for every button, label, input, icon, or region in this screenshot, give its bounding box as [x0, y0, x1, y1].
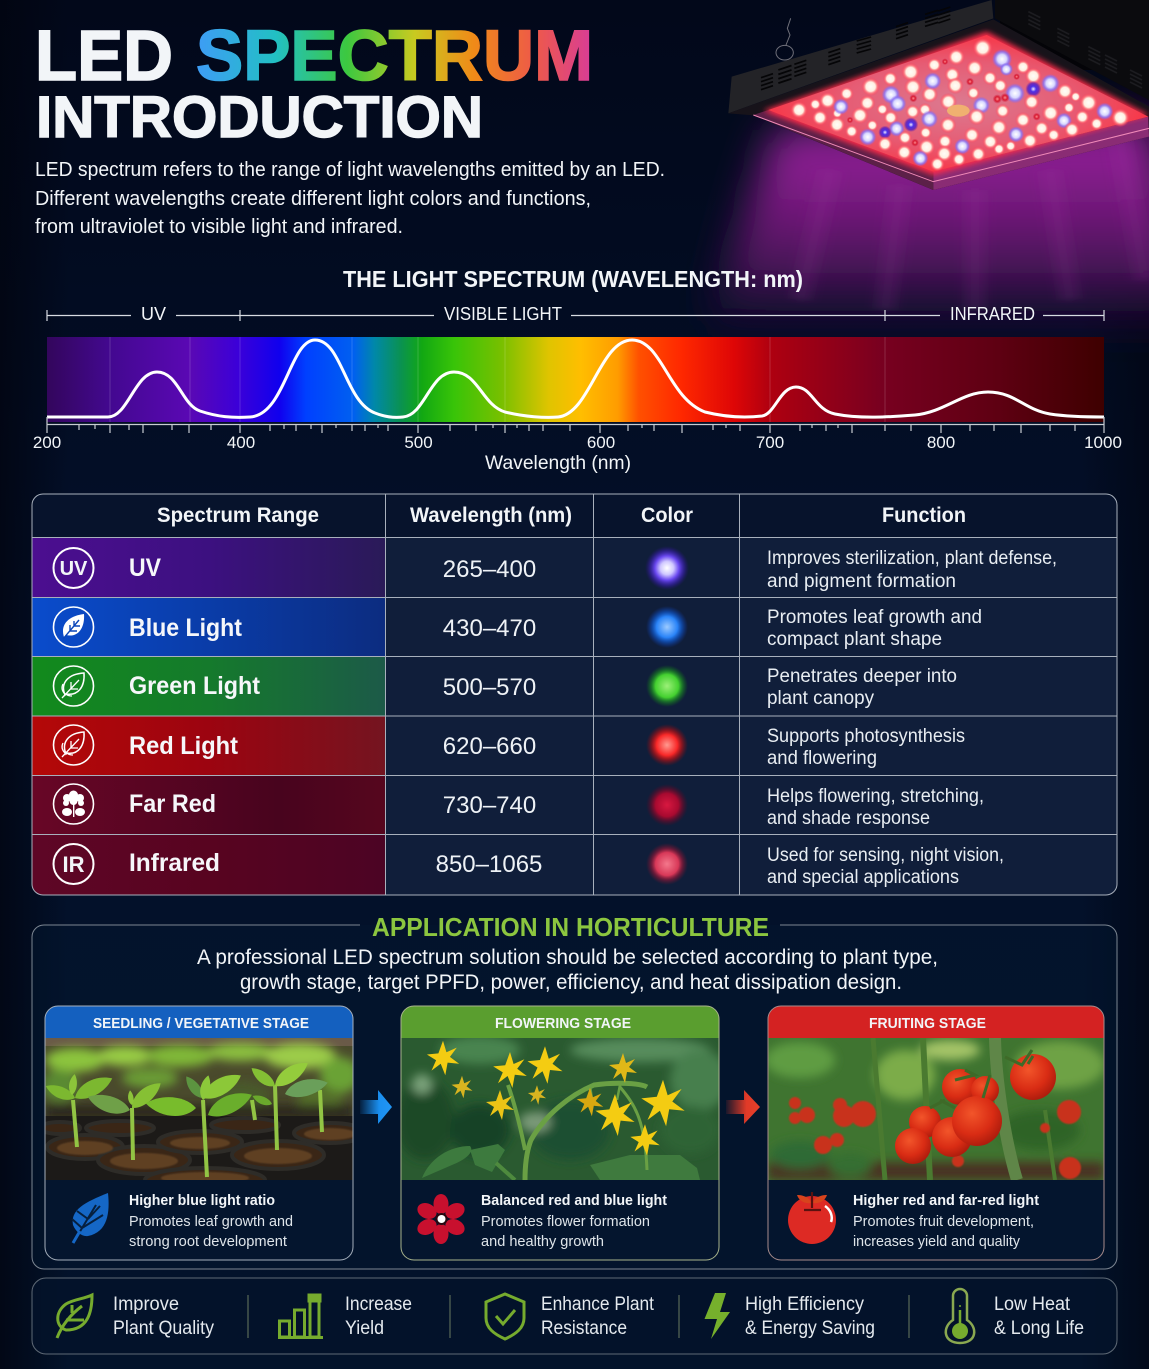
title — [35, 17, 593, 150]
arrow: red — [726, 1090, 760, 1124]
icon: blue leaf — [72, 1193, 109, 1243]
icon: blue leaf — [54, 607, 94, 647]
background tomatoes — [789, 1097, 1081, 1179]
benefit: plant quality: Plant Quality — [113, 1318, 214, 1339]
card: fruiting stage — [765, 1006, 1105, 1260]
title: LED — [35, 17, 173, 96]
foreground tomatoes — [895, 1054, 1056, 1164]
wavelength axis — [47, 417, 1104, 433]
yellow blossoms — [427, 1041, 685, 1156]
icon: tomato — [788, 1192, 836, 1244]
row: Green Light — [54, 665, 957, 709]
row: Green Light: Penetrates deeper into — [767, 666, 957, 687]
benefit: long life: & Long Life — [994, 1318, 1084, 1339]
row: Far Red: Helps flowering, stretching, — [767, 786, 984, 807]
description: growth stage, target PPFD, power, efficiency, and heat dissipation design. — [240, 971, 902, 994]
row: Blue Light: Promotes leaf growth and — [767, 607, 982, 628]
intro text: LED spectrum refers to the range of light wavelengths emitted by an LED. — [35, 159, 665, 181]
intro text: Different wavelengths create different light colors and functions, — [35, 188, 591, 210]
row: UV: UV — [129, 554, 161, 582]
spectrum colour band — [47, 337, 1104, 422]
illustration: grow light panel — [728, 0, 1149, 190]
heading: APPLICATION IN HORTICULTURE — [372, 912, 769, 942]
arrow: blue — [360, 1090, 392, 1124]
row: Red Light: Red Light — [129, 732, 239, 760]
icon: red leaf — [54, 725, 94, 765]
axis labels: 200 — [33, 433, 61, 452]
card text: Promotes flower formation — [481, 1213, 650, 1230]
benefit: resistance: Resistance — [541, 1318, 627, 1339]
vines — [873, 1038, 1055, 1180]
intro text: from ultraviolet to visible light and infrared. — [35, 216, 403, 238]
benefit: resistance: Enhance Plant — [541, 1294, 655, 1315]
lamp right side — [995, 0, 1149, 100]
row: Infrared: Infrared — [129, 849, 220, 877]
icon: far red plant — [54, 784, 94, 824]
row: Infrared: Used for sensing, night vision, — [767, 845, 1004, 866]
card: seedling stage — [40, 1006, 366, 1260]
title: INTRODUCTION — [36, 85, 483, 150]
icon: UV: UV — [60, 558, 88, 580]
icon: bar chart — [278, 1295, 323, 1338]
main stem — [995, 1038, 1017, 1180]
title: SPECTRUM — [196, 17, 593, 96]
row: Blue Light: 430–470 — [443, 615, 536, 642]
description: A professional LED spectrum solution should be selected according to plant type, — [197, 946, 938, 969]
row: Blue Light: compact plant shape — [767, 629, 942, 650]
card: fruiting stage: FRUITING STAGE — [869, 1015, 986, 1032]
photo: yellow flowers — [395, 1036, 730, 1180]
axis labels: 1000 — [1084, 433, 1122, 452]
benefit: plant quality — [57, 1294, 214, 1339]
icon: shield — [486, 1294, 524, 1339]
table header: Spectrum Range — [157, 504, 319, 527]
vents — [761, 7, 1142, 90]
icon: UV — [54, 548, 94, 588]
card text: increases yield and quality — [853, 1233, 1020, 1250]
axis labels: Wavelength (nm) — [485, 453, 631, 474]
row: Red Light — [54, 724, 965, 769]
spectrum region brackets: UV — [141, 304, 166, 324]
row: Blue Light — [54, 606, 982, 650]
icon: lightning bolt — [704, 1293, 730, 1339]
benefit: plant quality: Improve — [113, 1294, 179, 1315]
row: Infrared — [54, 843, 1004, 888]
axis labels: 500 — [404, 433, 433, 452]
row: Far Red: and shade response — [767, 808, 930, 829]
seedling tray — [46, 1116, 352, 1180]
card text: Higher blue light ratio — [129, 1192, 275, 1209]
benefit: energy saving: & Energy Saving — [745, 1318, 875, 1339]
hanging chain — [776, 18, 793, 60]
table header — [157, 504, 966, 527]
table header: Wavelength (nm) — [410, 504, 572, 527]
row: Green Light: Green Light — [129, 672, 261, 700]
benefit: yield: Increase — [345, 1294, 412, 1315]
spectrum table — [32, 494, 1117, 895]
card: flowering stage: FLOWERING STAGE — [495, 1015, 631, 1032]
row: UV: and pigment formation — [767, 571, 956, 592]
benefits bar — [32, 1278, 1117, 1354]
row: Red Light: and flowering — [767, 748, 877, 769]
icon: green leaf — [54, 666, 94, 706]
benefit: yield: Yield — [345, 1318, 384, 1339]
axis labels — [33, 433, 1122, 474]
row: UV: Improves sterilization, plant defense, — [767, 548, 1057, 569]
benefit: long life: Low Heat — [994, 1294, 1071, 1315]
card text — [129, 1192, 293, 1250]
lamp frame — [728, 19, 1149, 190]
benefit: energy saving: High Efficiency — [745, 1294, 864, 1315]
light beams — [700, 120, 1149, 345]
row: Infrared: 850–1065 — [436, 851, 542, 878]
row: Far Red: 730–740 — [443, 792, 536, 819]
row: Infrared: and special applications — [767, 867, 959, 888]
stems — [508, 1083, 647, 1180]
icon: red flower — [415, 1194, 467, 1244]
lamp left side — [728, 0, 993, 113]
axis labels: 400 — [227, 433, 255, 452]
axis labels: 600 — [587, 433, 615, 452]
row: Green Light: plant canopy — [767, 688, 874, 709]
benefit: long life — [946, 1289, 1084, 1343]
benefit: resistance — [486, 1294, 655, 1339]
card text: strong root development — [129, 1233, 288, 1250]
card text: Promotes leaf growth and — [129, 1213, 293, 1230]
card: flowering stage — [395, 1006, 730, 1260]
spectrum region brackets — [47, 304, 1104, 324]
icon: leaf — [57, 1295, 92, 1338]
intro text — [35, 159, 665, 238]
axis labels: 800 — [927, 433, 955, 452]
axis labels: 700 — [756, 433, 784, 452]
row: Far Red: Far Red — [129, 790, 216, 818]
spectrum chart — [33, 337, 1122, 474]
emission curve — [47, 340, 1104, 417]
card text — [853, 1192, 1039, 1250]
benefit: energy saving — [704, 1293, 875, 1339]
row: Red Light: Supports photosynthesis — [767, 726, 965, 747]
panel: application in horticulture — [32, 912, 1117, 1269]
spectrum region brackets: VISIBLE LIGHT — [444, 304, 562, 324]
chart heading: THE LIGHT SPECTRUM (WAVELENGTH: nm) — [343, 266, 803, 292]
photo: tomatoes on the vine — [765, 1038, 1105, 1180]
seedling plants — [43, 1057, 329, 1177]
benefit: yield — [278, 1294, 412, 1339]
description — [197, 946, 938, 994]
table header: Color — [641, 504, 693, 527]
card text — [481, 1192, 667, 1250]
table header: Function — [882, 504, 966, 527]
card text: Balanced red and blue light — [481, 1192, 667, 1209]
row: UV: 265–400 — [443, 556, 536, 583]
photo: seedlings in trays — [46, 1038, 352, 1180]
LED board — [768, 35, 1148, 172]
icon: thermometer — [946, 1289, 974, 1343]
card text: and healthy growth — [481, 1233, 604, 1250]
icon: IR — [54, 844, 94, 884]
calyx — [930, 1050, 1033, 1108]
row: Green Light: 500–570 — [443, 674, 536, 701]
card: seedling stage: SEEDLING / VEGETATIVE STAGE — [93, 1015, 309, 1032]
spectrum region brackets: INFRARED — [950, 304, 1035, 324]
foliage — [422, 1144, 700, 1180]
LED chips — [790, 38, 1130, 171]
card text: Promotes fruit development, — [853, 1213, 1034, 1230]
row: UV — [54, 546, 1057, 592]
board glow — [763, 32, 1149, 175]
row: Blue Light: Blue Light — [129, 614, 243, 642]
icon: IR: IR — [62, 852, 85, 877]
row: Far Red — [54, 784, 984, 829]
card text: Higher red and far-red light — [853, 1192, 1039, 1209]
row: Red Light: 620–660 — [443, 733, 536, 760]
